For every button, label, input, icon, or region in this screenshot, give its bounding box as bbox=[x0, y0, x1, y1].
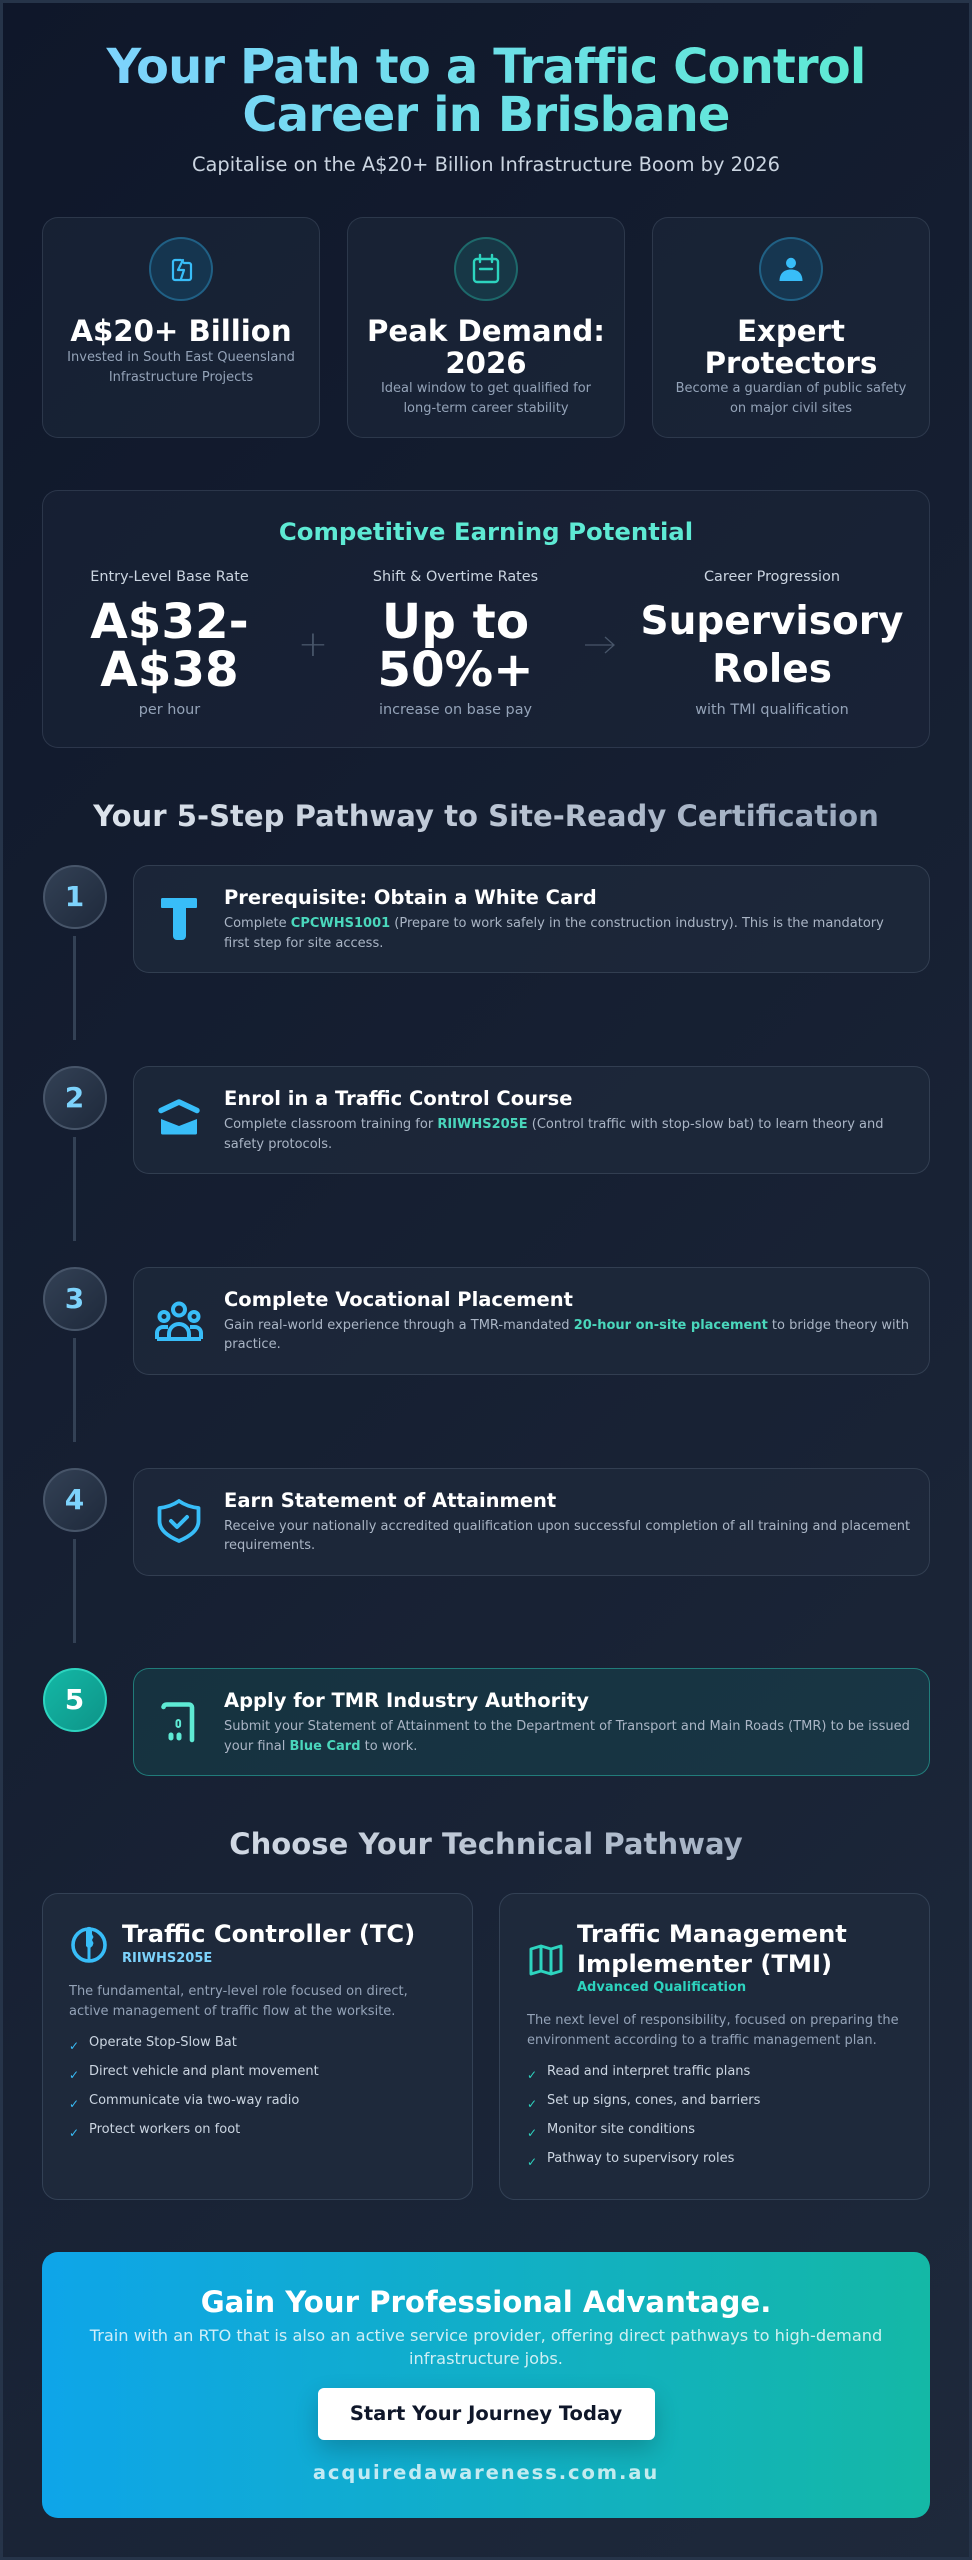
earning: overtime bbox=[373, 569, 538, 718]
label: Shift & Overtime Rates bbox=[373, 569, 538, 585]
panel: traffic management implementer bbox=[499, 1893, 930, 2200]
step 2 card bbox=[133, 1066, 930, 1174]
heading: 5-step pathway: Your 5-Step Pathway to Site-Ready Certification bbox=[93, 799, 879, 833]
checklist: Read and interpret traffic plans bbox=[547, 2064, 750, 2079]
heading: technical pathway: Choose Your Technical Pathway bbox=[229, 1827, 743, 1861]
icon: authority card bbox=[161, 1702, 194, 1742]
step 1 connector bbox=[73, 936, 76, 1040]
step 4 number: 4 bbox=[65, 1482, 84, 1516]
checklist: ✓ bbox=[69, 2126, 79, 2140]
cta text: Train with an RTO that is also an active service provider, offering direct pathways to high-demand bbox=[90, 2326, 882, 2345]
stat heading: A$20+ Billion bbox=[70, 314, 292, 348]
step title: Enrol in a Traffic Control Course bbox=[224, 1087, 572, 1110]
checklist bbox=[69, 2035, 319, 2140]
panel: key stats bbox=[42, 217, 930, 438]
step description: Complete CPCWHS1001 (Prepare to work safely in the construction industry). This is the mandatory bbox=[224, 916, 884, 931]
step description: your final Blue Card to work. bbox=[224, 1738, 417, 1754]
pathway description bbox=[526, 2013, 899, 2048]
button bbox=[318, 2388, 654, 2440]
value bbox=[90, 594, 249, 698]
step title: Earn Statement of Attainment bbox=[224, 1488, 556, 1512]
item bbox=[69, 2093, 299, 2111]
pathway title: Traffic Controller (TC) bbox=[122, 1920, 415, 1948]
value bbox=[377, 594, 534, 698]
item bbox=[527, 2064, 750, 2082]
icon: stop-slow bat bbox=[71, 1926, 107, 1963]
icon: billion document bolt bbox=[149, 237, 213, 301]
step description bbox=[224, 1719, 910, 1754]
sublabel: with TMI qualification bbox=[695, 702, 849, 718]
item bbox=[527, 2122, 695, 2140]
step description bbox=[224, 1518, 910, 1553]
stat heading: Peak Demand: bbox=[367, 314, 605, 348]
stat heading: 2026 bbox=[445, 346, 527, 380]
step 4 number bbox=[42, 1468, 106, 1532]
step description: Receive your nationally accredited qualification upon successful completion of all training and placement bbox=[224, 1518, 910, 1534]
pathway title: Implementer (TMI) bbox=[577, 1950, 832, 1978]
pathway description bbox=[68, 1984, 408, 2018]
step title: Apply for TMR Industry Authority bbox=[224, 1689, 589, 1712]
value: Roles bbox=[712, 646, 832, 692]
sublabel: per hour bbox=[139, 702, 200, 718]
step 5 card bbox=[133, 1668, 930, 1776]
cta text bbox=[90, 2326, 882, 2368]
stat description: Invested in South East Queensland bbox=[67, 350, 295, 365]
pathway description: active management of traffic flow at the worksite. bbox=[69, 2004, 395, 2018]
step description: Complete classroom training for RIIWHS205E (Control traffic with stop-slow bat) to learn theory and bbox=[224, 1117, 883, 1132]
step 3 number: 3 bbox=[65, 1282, 84, 1314]
value: Supervisory bbox=[641, 598, 903, 644]
checklist: ✓ bbox=[527, 2126, 537, 2140]
step 1 number: 1 bbox=[65, 880, 84, 913]
icon: graduation envelope bbox=[158, 1099, 200, 1134]
checklist: Operate Stop-Slow Bat bbox=[89, 2035, 237, 2050]
step description: Gain real-world experience through a TMR-mandated 20-hour on-site placement to bridge theory with bbox=[224, 1318, 909, 1332]
checklist: ✓ bbox=[69, 2068, 79, 2082]
step 5 number: 5 bbox=[65, 1683, 84, 1716]
step description bbox=[224, 916, 884, 950]
arrow bbox=[585, 636, 615, 654]
label: Entry-Level Base Rate bbox=[90, 569, 249, 585]
checklist: Direct vehicle and plant movement bbox=[89, 2064, 319, 2079]
stat description: on major civil sites bbox=[730, 400, 852, 416]
item bbox=[527, 2151, 734, 2169]
item bbox=[69, 2122, 240, 2140]
stat description bbox=[381, 381, 591, 416]
checklist: ✓ bbox=[527, 2155, 537, 2169]
stat heading: Protectors bbox=[705, 346, 877, 380]
value: 50%+ bbox=[377, 642, 534, 698]
cta heading: Gain Your Professional Advantage. bbox=[201, 2284, 771, 2318]
earning: base rate bbox=[90, 569, 249, 718]
checklist bbox=[527, 2064, 760, 2169]
panel: earning potential bbox=[42, 490, 930, 748]
stat card: A$20+ Billion bbox=[42, 217, 320, 438]
step 1 card bbox=[133, 865, 930, 973]
panel: call to action bbox=[42, 2252, 930, 2518]
step 3 number bbox=[42, 1266, 106, 1330]
title bbox=[65, 43, 907, 139]
checklist: ✓ bbox=[69, 2097, 79, 2111]
icon: T bbox=[161, 898, 197, 940]
stat description: Ideal window to get qualified for bbox=[381, 381, 591, 396]
pathway description: The fundamental, entry-level role focused on direct, bbox=[69, 1984, 408, 1999]
checklist: ✓ bbox=[527, 2097, 537, 2111]
button: Start Your Journey Today bbox=[350, 2402, 622, 2425]
stat description: long-term career stability bbox=[403, 400, 569, 416]
stat description: Become a guardian of public safety bbox=[676, 381, 906, 396]
checklist: Pathway to supervisory roles bbox=[547, 2151, 734, 2166]
sublabel: increase on base pay bbox=[379, 702, 532, 718]
step title: Prerequisite: Obtain a White Card bbox=[224, 886, 597, 909]
step 2 number bbox=[42, 1066, 106, 1130]
checklist: Protect workers on foot bbox=[89, 2122, 240, 2137]
step 4 card bbox=[133, 1468, 930, 1576]
stat description bbox=[676, 381, 906, 416]
icon: shield check bbox=[158, 1499, 200, 1543]
checklist: ✓ bbox=[527, 2068, 537, 2082]
pathway title: Traffic Management bbox=[577, 1920, 847, 1948]
title: Career in Brisbane bbox=[242, 87, 730, 143]
checklist: Set up signs, cones, and barriers bbox=[547, 2093, 760, 2108]
pathway title bbox=[577, 1920, 847, 1978]
website: acquiredawareness.com.au bbox=[313, 2461, 659, 2484]
stat description bbox=[67, 350, 295, 384]
checklist: Monitor site conditions bbox=[547, 2122, 695, 2137]
operator: plus: + bbox=[298, 624, 328, 665]
step title: Complete Vocational Placement bbox=[224, 1288, 573, 1310]
subtitle: Capitalise on the A$20+ Billion Infrastructure Boom by 2026 bbox=[192, 153, 780, 176]
step 3 connector bbox=[73, 1338, 76, 1442]
icon: person bbox=[759, 237, 823, 301]
cta text: infrastructure jobs. bbox=[409, 2349, 563, 2368]
stat heading bbox=[705, 314, 877, 380]
panel: traffic controller bbox=[42, 1893, 473, 2200]
step description: safety protocols. bbox=[224, 1136, 332, 1152]
step 5 number bbox=[42, 1668, 106, 1732]
step description: first step for site access. bbox=[224, 936, 383, 950]
item bbox=[69, 2035, 237, 2053]
step 2 number: 2 bbox=[65, 1081, 84, 1114]
heading: technical pathway bbox=[42, 1824, 930, 1864]
value: A$38 bbox=[100, 642, 239, 698]
label: Career Progression bbox=[704, 569, 840, 585]
stat card: Peak Demand bbox=[347, 217, 625, 438]
icon: team bbox=[155, 1302, 203, 1341]
pathway code: RIIWHS205E bbox=[122, 1951, 212, 1966]
step description bbox=[224, 1117, 883, 1152]
icon: calendar bbox=[454, 237, 518, 301]
value bbox=[641, 598, 903, 692]
earning: progression bbox=[641, 569, 903, 718]
step description: practice. bbox=[224, 1337, 281, 1352]
step 1 number bbox=[42, 865, 106, 929]
checklist: ✓ bbox=[69, 2039, 79, 2053]
item bbox=[69, 2064, 319, 2082]
stat heading: Expert bbox=[737, 314, 845, 348]
title: Your Path to a Traffic Control bbox=[107, 39, 865, 95]
stat heading bbox=[367, 314, 605, 380]
value: Up to bbox=[382, 594, 529, 650]
stat description: Infrastructure Projects bbox=[109, 370, 253, 384]
pathway description: The next level of responsibility, focused on preparing the bbox=[527, 2013, 899, 2028]
item bbox=[527, 2093, 760, 2111]
pathway description: environment according to a traffic management plan. bbox=[527, 2032, 877, 2048]
value: A$32- bbox=[90, 594, 249, 650]
checklist: Communicate via two-way radio bbox=[89, 2093, 299, 2108]
step 3 card bbox=[133, 1266, 930, 1374]
step description: Submit your Statement of Attainment to the Department of Transport and Main Roads (TMR) to be issued bbox=[224, 1719, 910, 1734]
stat card: Expert Protectors bbox=[652, 217, 930, 438]
step description bbox=[224, 1318, 909, 1352]
step 4 connector bbox=[73, 1538, 76, 1642]
step 2 connector bbox=[73, 1137, 76, 1241]
panel heading: Competitive Earning Potential bbox=[279, 517, 693, 546]
pathway code: Advanced Qualification bbox=[577, 1980, 746, 1995]
step description: requirements. bbox=[224, 1538, 315, 1553]
icon: map bbox=[530, 1944, 562, 1976]
